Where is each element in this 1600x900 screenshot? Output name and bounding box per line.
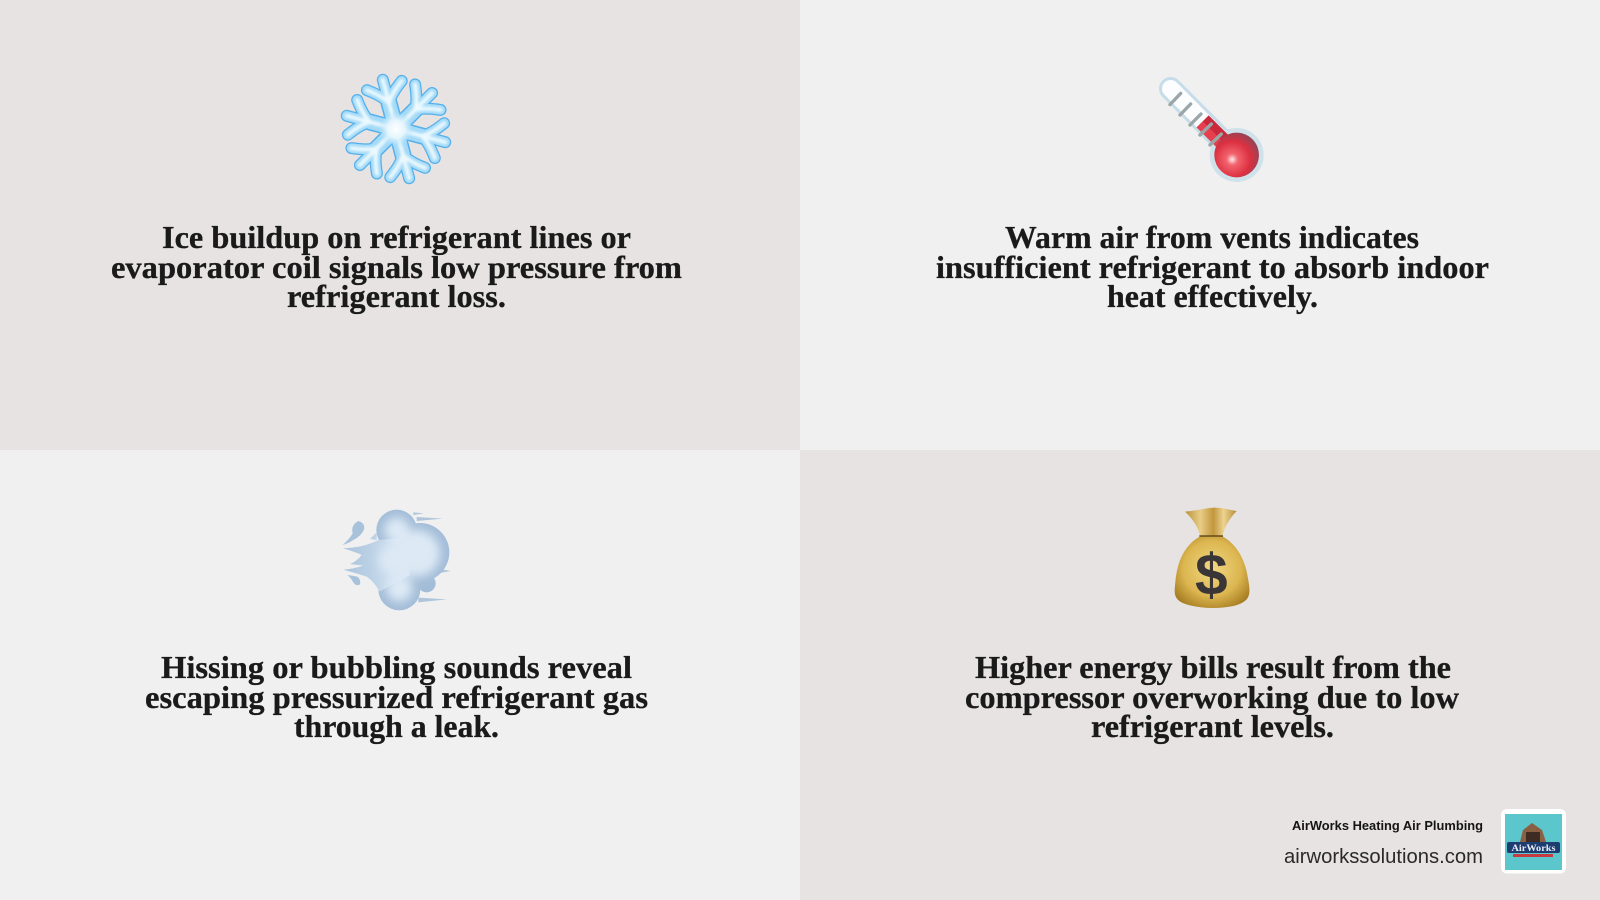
text: higher energy bills description: refrigerant levels. — [1091, 708, 1334, 744]
brand name: AirWorks Heating Air Plumbing — [1292, 818, 1483, 833]
text: hissing sounds description — [145, 649, 648, 744]
logo — [1501, 809, 1566, 874]
text: ice buildup description: Ice buildup on refrigerant lines or — [162, 219, 631, 255]
panel: ice buildup — [0, 0, 800, 450]
icon: snowflake — [342, 75, 450, 183]
icon: thermometer — [1170, 89, 1264, 182]
text: warm air description — [936, 219, 1489, 314]
text: higher energy bills description: compressor overworking due to low — [965, 679, 1459, 715]
text: hissing sounds description: escaping pressurized refrigerant gas — [145, 679, 648, 715]
icon: wind cloud — [343, 510, 451, 610]
text: warm air description: Warm air from vents indicates — [1005, 219, 1419, 255]
text: warm air description: heat effectively. — [1107, 278, 1318, 314]
text: ice buildup description — [111, 219, 682, 314]
text: higher energy bills description — [965, 649, 1459, 744]
icon: money bag: $ — [1195, 543, 1228, 608]
text: ice buildup description: evaporator coil signals low pressure from — [111, 249, 682, 285]
website: airworkssolutions.com — [1284, 846, 1483, 868]
panel: higher energy bills — [800, 450, 1600, 900]
text: ice buildup description: refrigerant loss. — [287, 278, 506, 314]
text: hissing sounds description: through a leak. — [294, 708, 499, 744]
panel: warm air — [800, 0, 1600, 450]
footer: brand block — [1284, 809, 1566, 874]
text: hissing sounds description: Hissing or bubbling sounds reveal — [161, 649, 632, 685]
panel: hissing sounds — [0, 450, 800, 900]
logo: AirWorks — [1512, 843, 1556, 853]
icon: money bag — [1175, 508, 1249, 608]
text: warm air description: insufficient refrigerant to absorb indoor — [936, 249, 1489, 285]
text: higher energy bills description: Higher energy bills result from the — [975, 649, 1451, 685]
